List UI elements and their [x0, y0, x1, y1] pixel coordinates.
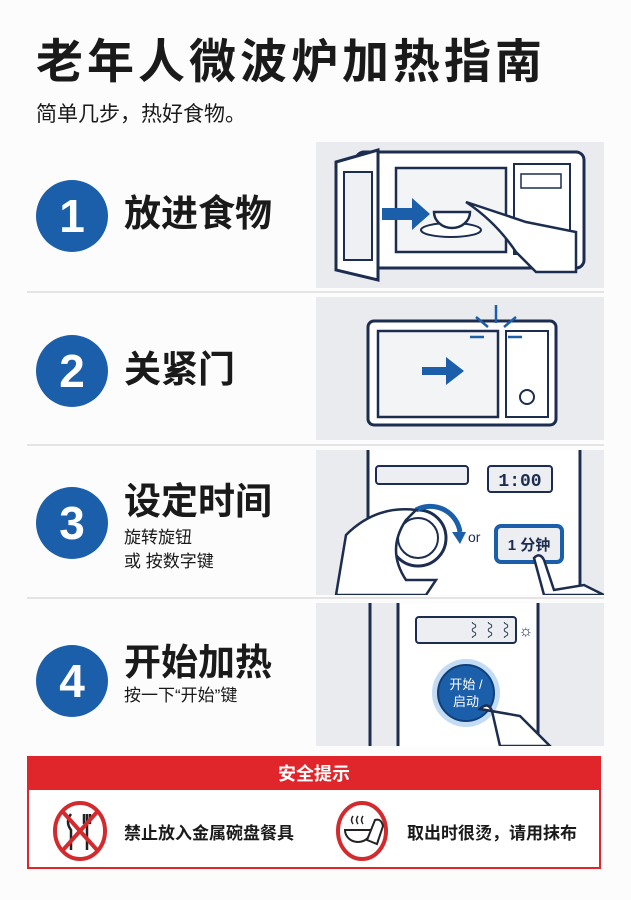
- illustration: dial and button: 1 分钟: [508, 536, 550, 554]
- illustration: start button: ⌇⌇⌇ ☼: [466, 622, 533, 640]
- step 3 sub text: 或 按数字键: [124, 552, 214, 571]
- step 4 label: 开始加热: [124, 642, 272, 683]
- number 3: [36, 487, 108, 559]
- step 4: [36, 603, 604, 746]
- step 3 sub text: [124, 528, 214, 571]
- warning text: hot: 取出时很烫，请用抹布: [407, 824, 577, 843]
- illustration: dial and button: or: [468, 529, 481, 545]
- title: 老年人微波炉加热指南: [36, 35, 546, 88]
- number 1: [36, 180, 108, 252]
- illustration: start button: 开始 /: [449, 677, 483, 692]
- number 2: 2: [59, 345, 85, 397]
- number 3: 3: [59, 497, 85, 549]
- number 2: [36, 335, 108, 407]
- step 1 label: 放进食物: [124, 193, 272, 234]
- step 3 label: 设定时间: [124, 481, 272, 522]
- safety header: 安全提示: [278, 764, 350, 784]
- warning text: no metal: 禁止放入金属碗盘餐具: [124, 824, 294, 843]
- number 4: [36, 645, 108, 717]
- illustration: closed microwave: [316, 297, 604, 440]
- illustration: dial and button: [316, 450, 604, 595]
- step 3 sub text: 旋转旋钮: [124, 528, 192, 547]
- number 1: 1: [59, 190, 85, 242]
- icon: no metal: [53, 801, 107, 861]
- illustration: start button: 启动: [453, 694, 479, 709]
- safety header: [29, 758, 599, 790]
- illustration: dial and button: 1:00: [498, 472, 542, 492]
- icon: hot bowl: [336, 801, 388, 861]
- subtitle: 简单几步，热好食物。: [36, 103, 246, 126]
- illustration: start button: [316, 603, 604, 746]
- step 1: [36, 142, 604, 288]
- step 4 sub text: 按一下“开始”键: [124, 686, 237, 705]
- step 2 label: 关紧门: [124, 349, 235, 390]
- safety panel: [27, 756, 601, 869]
- illustration: open microwave: [316, 142, 604, 288]
- number 4: 4: [59, 655, 85, 707]
- step 3: [36, 450, 604, 595]
- step 2: [36, 297, 604, 440]
